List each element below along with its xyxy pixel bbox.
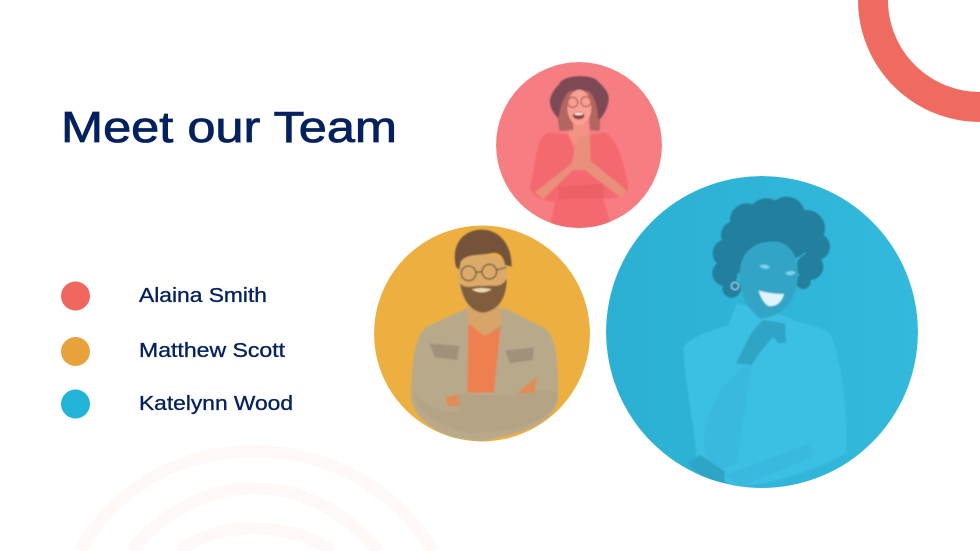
portrait: Alaina Smith in pink circle [496,62,662,228]
sweater [683,303,846,487]
hand at chest [736,320,786,365]
legend item: Matthew Scott [61,337,285,366]
arms and hands [535,134,626,199]
eyes [759,265,796,275]
neck [467,304,503,336]
portrait: Matthew Scott in yellow circle [374,226,590,442]
face [567,90,591,126]
curly hair [712,197,830,298]
decorative corner arc [873,0,980,107]
legend item: Katelynn Wood: Katelynn Wood [139,392,293,415]
legend list [61,282,293,418]
sleeve shading [704,365,813,487]
earring [731,282,739,290]
glasses [461,264,506,281]
face [740,242,798,318]
legend item: Katelynn Wood [61,390,293,418]
hair [455,230,512,270]
smile [759,291,784,306]
mouth [472,288,492,292]
jacket [411,308,558,442]
dress [530,132,628,228]
title: Meet our Team [61,103,397,152]
hat [550,76,609,120]
pockets [429,343,534,363]
mouth [573,112,584,119]
glasses [568,97,591,107]
t-shirt [467,323,501,393]
hands [445,377,537,407]
legend item: Alaina Smith [61,282,267,310]
legend item: Alaina Smith: Alaina Smith [139,284,267,307]
neck and chest [568,123,590,146]
head [457,255,507,313]
hair [558,88,600,131]
decorative concentric arcs [80,451,433,551]
legend item: Matthew Scott: Matthew Scott [139,339,285,362]
hand at bottom [687,455,725,483]
portrait: Katelynn Wood in blue circle [606,176,918,488]
beard [460,278,507,313]
folded arms [413,390,557,433]
